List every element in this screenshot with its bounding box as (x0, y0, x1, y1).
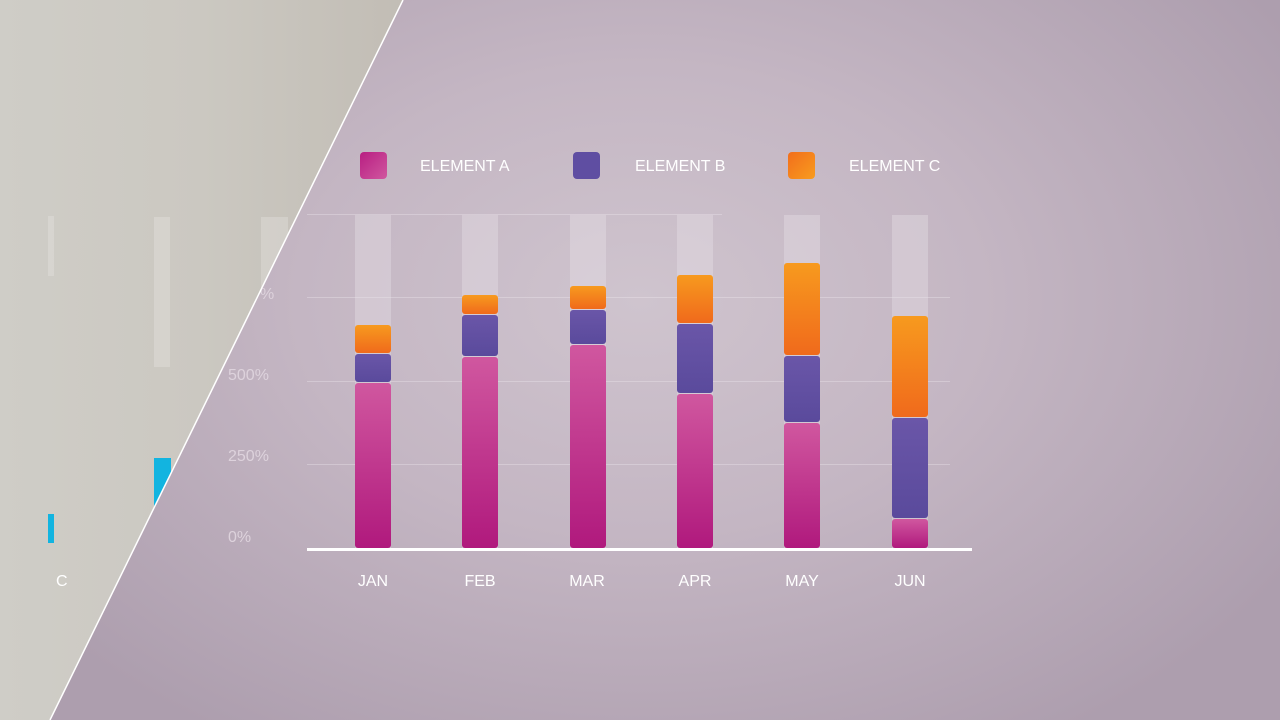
faint bars (48, 216, 54, 276)
label C: C (56, 573, 68, 590)
legend: element B (573, 152, 725, 179)
month labels: APR (679, 573, 711, 590)
bar: FEB (462, 215, 498, 548)
legend: element A (360, 152, 510, 179)
y axis labels: % (260, 286, 274, 303)
blue bars (48, 514, 54, 543)
y axis labels: 0% (228, 529, 251, 546)
y axis labels: 500% (228, 367, 269, 384)
legend: element A: ELEMENT A (420, 158, 510, 175)
panel: previous slide (left wedge) (0, 0, 404, 720)
stacked bar chart (355, 215, 928, 548)
legend: element B: ELEMENT B (635, 158, 725, 175)
month labels: MAY (785, 573, 819, 590)
bar: APR (677, 215, 713, 548)
month labels: FEB (464, 573, 496, 590)
bar: JUN (892, 215, 928, 548)
y axis labels: 250% (228, 448, 269, 465)
month labels: JAN (358, 573, 388, 590)
bar: MAR (570, 215, 606, 548)
month labels (358, 573, 926, 590)
baseline (307, 548, 972, 551)
month labels: JUN (894, 573, 926, 590)
y axis labels (228, 286, 274, 546)
bar: JAN (355, 215, 391, 548)
month labels: MAR (569, 573, 605, 590)
bar: MAY (784, 215, 820, 548)
legend: element C: ELEMENT C (849, 158, 940, 175)
legend: element C (788, 152, 940, 179)
